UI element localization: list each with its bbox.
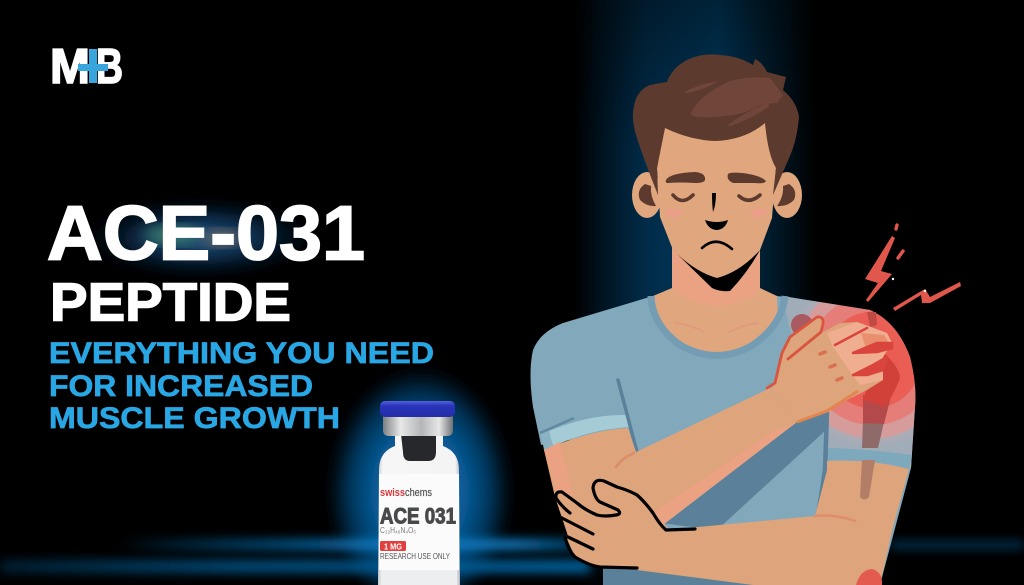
shoulder seam dark: [867, 312, 877, 327]
cheeks: [668, 209, 765, 216]
frown mouth: [702, 242, 732, 249]
neck shade: [672, 252, 760, 306]
logo: MB: M: [50, 40, 90, 94]
sleeve shadow bright red: [863, 352, 900, 407]
pain area on sleeve: [786, 296, 916, 468]
knuckles: [820, 352, 842, 380]
elbow red spot: [856, 569, 882, 585]
sleeve shadow dark red: [863, 392, 892, 424]
shirt crease lines: [618, 380, 637, 452]
pain sparks: [896, 225, 903, 258]
vial stopper: [401, 434, 436, 461]
left sleeve band: [549, 415, 630, 447]
shoulder dark patch: [791, 314, 813, 336]
arm shadow: [860, 460, 875, 500]
title: ACE-031: ACE-031: [47, 190, 365, 276]
elbow crease: [616, 453, 634, 467]
finger lines: [835, 328, 892, 375]
pain bolt lower: [893, 282, 961, 311]
gripping hand: [556, 480, 695, 570]
forearm light shade: [653, 422, 797, 525]
upper arm shade: [544, 442, 574, 497]
palm: [770, 317, 892, 422]
man illustration: [530, 54, 961, 585]
thumb outline: [767, 317, 823, 388]
lit fingers: [827, 322, 892, 385]
collar: [651, 296, 785, 356]
subtitle: PEPTIDE: PEPTIDE: [50, 272, 291, 332]
tagline: FOR INCREASED: [49, 370, 313, 403]
hand on shoulder: [767, 317, 892, 422]
tagline: MUSCLE GROWTH: [49, 402, 340, 435]
vial label: RESEARCH USE ONLY: [380, 552, 451, 561]
vial label: [379, 474, 459, 585]
neck: [653, 248, 778, 352]
vial label: ACE 031: [380, 504, 456, 528]
tagline: EVERYTHING YOU NEED: [49, 337, 434, 370]
vial cap: [380, 401, 455, 417]
tagline: [49, 337, 434, 435]
ears: [632, 172, 662, 218]
sleeve shadow grey: [862, 420, 884, 448]
shirt dark lower edge: [603, 560, 755, 585]
vial label: C₃₂H₄₆N₄O₅: [380, 526, 416, 535]
eyebrows: [666, 172, 766, 183]
collarbones: [675, 323, 758, 332]
vial glass body: [378, 436, 460, 585]
hand lower edge: [797, 391, 858, 422]
logo: MB: B: [96, 40, 123, 94]
pain bolt upper: [865, 236, 895, 302]
vial: [378, 401, 460, 585]
shirt torso: [530, 296, 915, 585]
hair: [633, 54, 799, 195]
logo: MB: [50, 40, 123, 94]
left arm and forearm: [544, 388, 797, 570]
closed eyes: [673, 195, 760, 200]
face: [657, 122, 776, 278]
chin shadow: [673, 250, 760, 291]
nose: [705, 193, 728, 230]
right sleeve band: [827, 448, 912, 469]
vial crimp: [383, 416, 453, 436]
hair highlight: [684, 77, 783, 126]
shirt fold shadow: [660, 410, 827, 530]
right upper arm: [637, 461, 909, 585]
vial label: chems: [405, 487, 432, 499]
vial label: 1 MG: [384, 542, 402, 552]
vial label: swiss: [380, 487, 405, 499]
